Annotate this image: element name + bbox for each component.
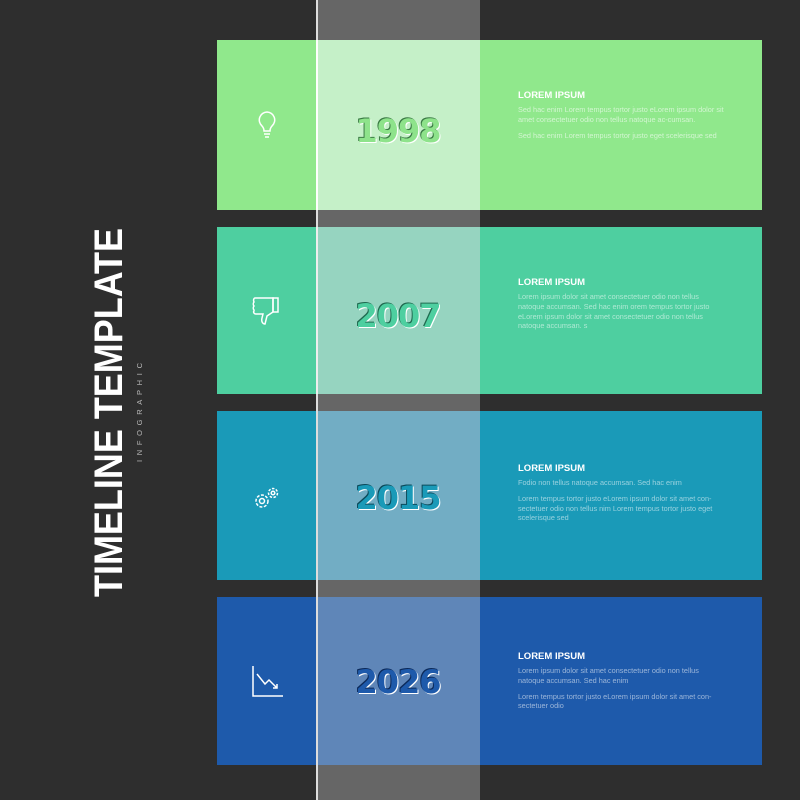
row 4 panel	[217, 597, 762, 765]
row 3 panel	[217, 411, 762, 580]
text block 2: Lorem ipsum dolor sit amet consectetuer odio non tellus natoque accumsan. Sed hac enim orem tempus tortor justo eLorem ipsum dolor sit amet consectetuer odio non tellus natoque accumsan. s	[518, 292, 709, 330]
year 1998: 1998	[355, 112, 441, 150]
year 2015: 2015	[355, 479, 441, 517]
icon: gears	[255, 488, 278, 508]
vertical band	[316, 0, 480, 800]
row 2 panel	[217, 227, 762, 394]
text block 1: Sed hac enim Lorem tempus tortor justo eLorem ipsum dolor sit amet consectetuer odio non tellus natoque ac-cumsan.	[518, 105, 724, 124]
text block 1	[518, 90, 724, 140]
icon: chart down	[252, 666, 283, 697]
text block 4: LOREM IPSUM	[518, 651, 585, 662]
year 2026: 2026	[355, 663, 441, 701]
text block 3: LOREM IPSUM	[518, 463, 585, 474]
text block 3: Fodio non tellus natoque accumsan. Sed hac enim	[518, 478, 682, 487]
year 2007: 2007	[355, 297, 441, 335]
text block 1: Sed hac enim Lorem tempus tortor justo eget scelerisque sed	[518, 131, 717, 140]
title: TIMELINE TEMPLATE	[87, 228, 131, 597]
text block 3	[518, 463, 712, 522]
text block 1: LOREM IPSUM	[518, 90, 585, 101]
text block 4	[518, 651, 712, 710]
title: INFOGRAPHIC	[135, 362, 144, 462]
text block 2: LOREM IPSUM	[518, 277, 585, 288]
text block 4: Lorem tempus tortor justo eLorem ipsum dolor sit amet con-sectetuer odio	[518, 692, 711, 710]
icon: thumbs down	[252, 297, 279, 325]
icon: light bulb	[258, 111, 276, 138]
row 1 panel	[217, 40, 762, 210]
text block 4: Lorem ipsum dolor sit amet consectetuer odio non tellus natoque accumsan. Sed hac enim	[518, 666, 699, 685]
text block 3: Lorem tempus tortor justo eLorem ipsum dolor sit amet con-sectetuer odio non tellus nim Lorem tempus tortor justo eget scelerisque sed	[518, 494, 712, 522]
